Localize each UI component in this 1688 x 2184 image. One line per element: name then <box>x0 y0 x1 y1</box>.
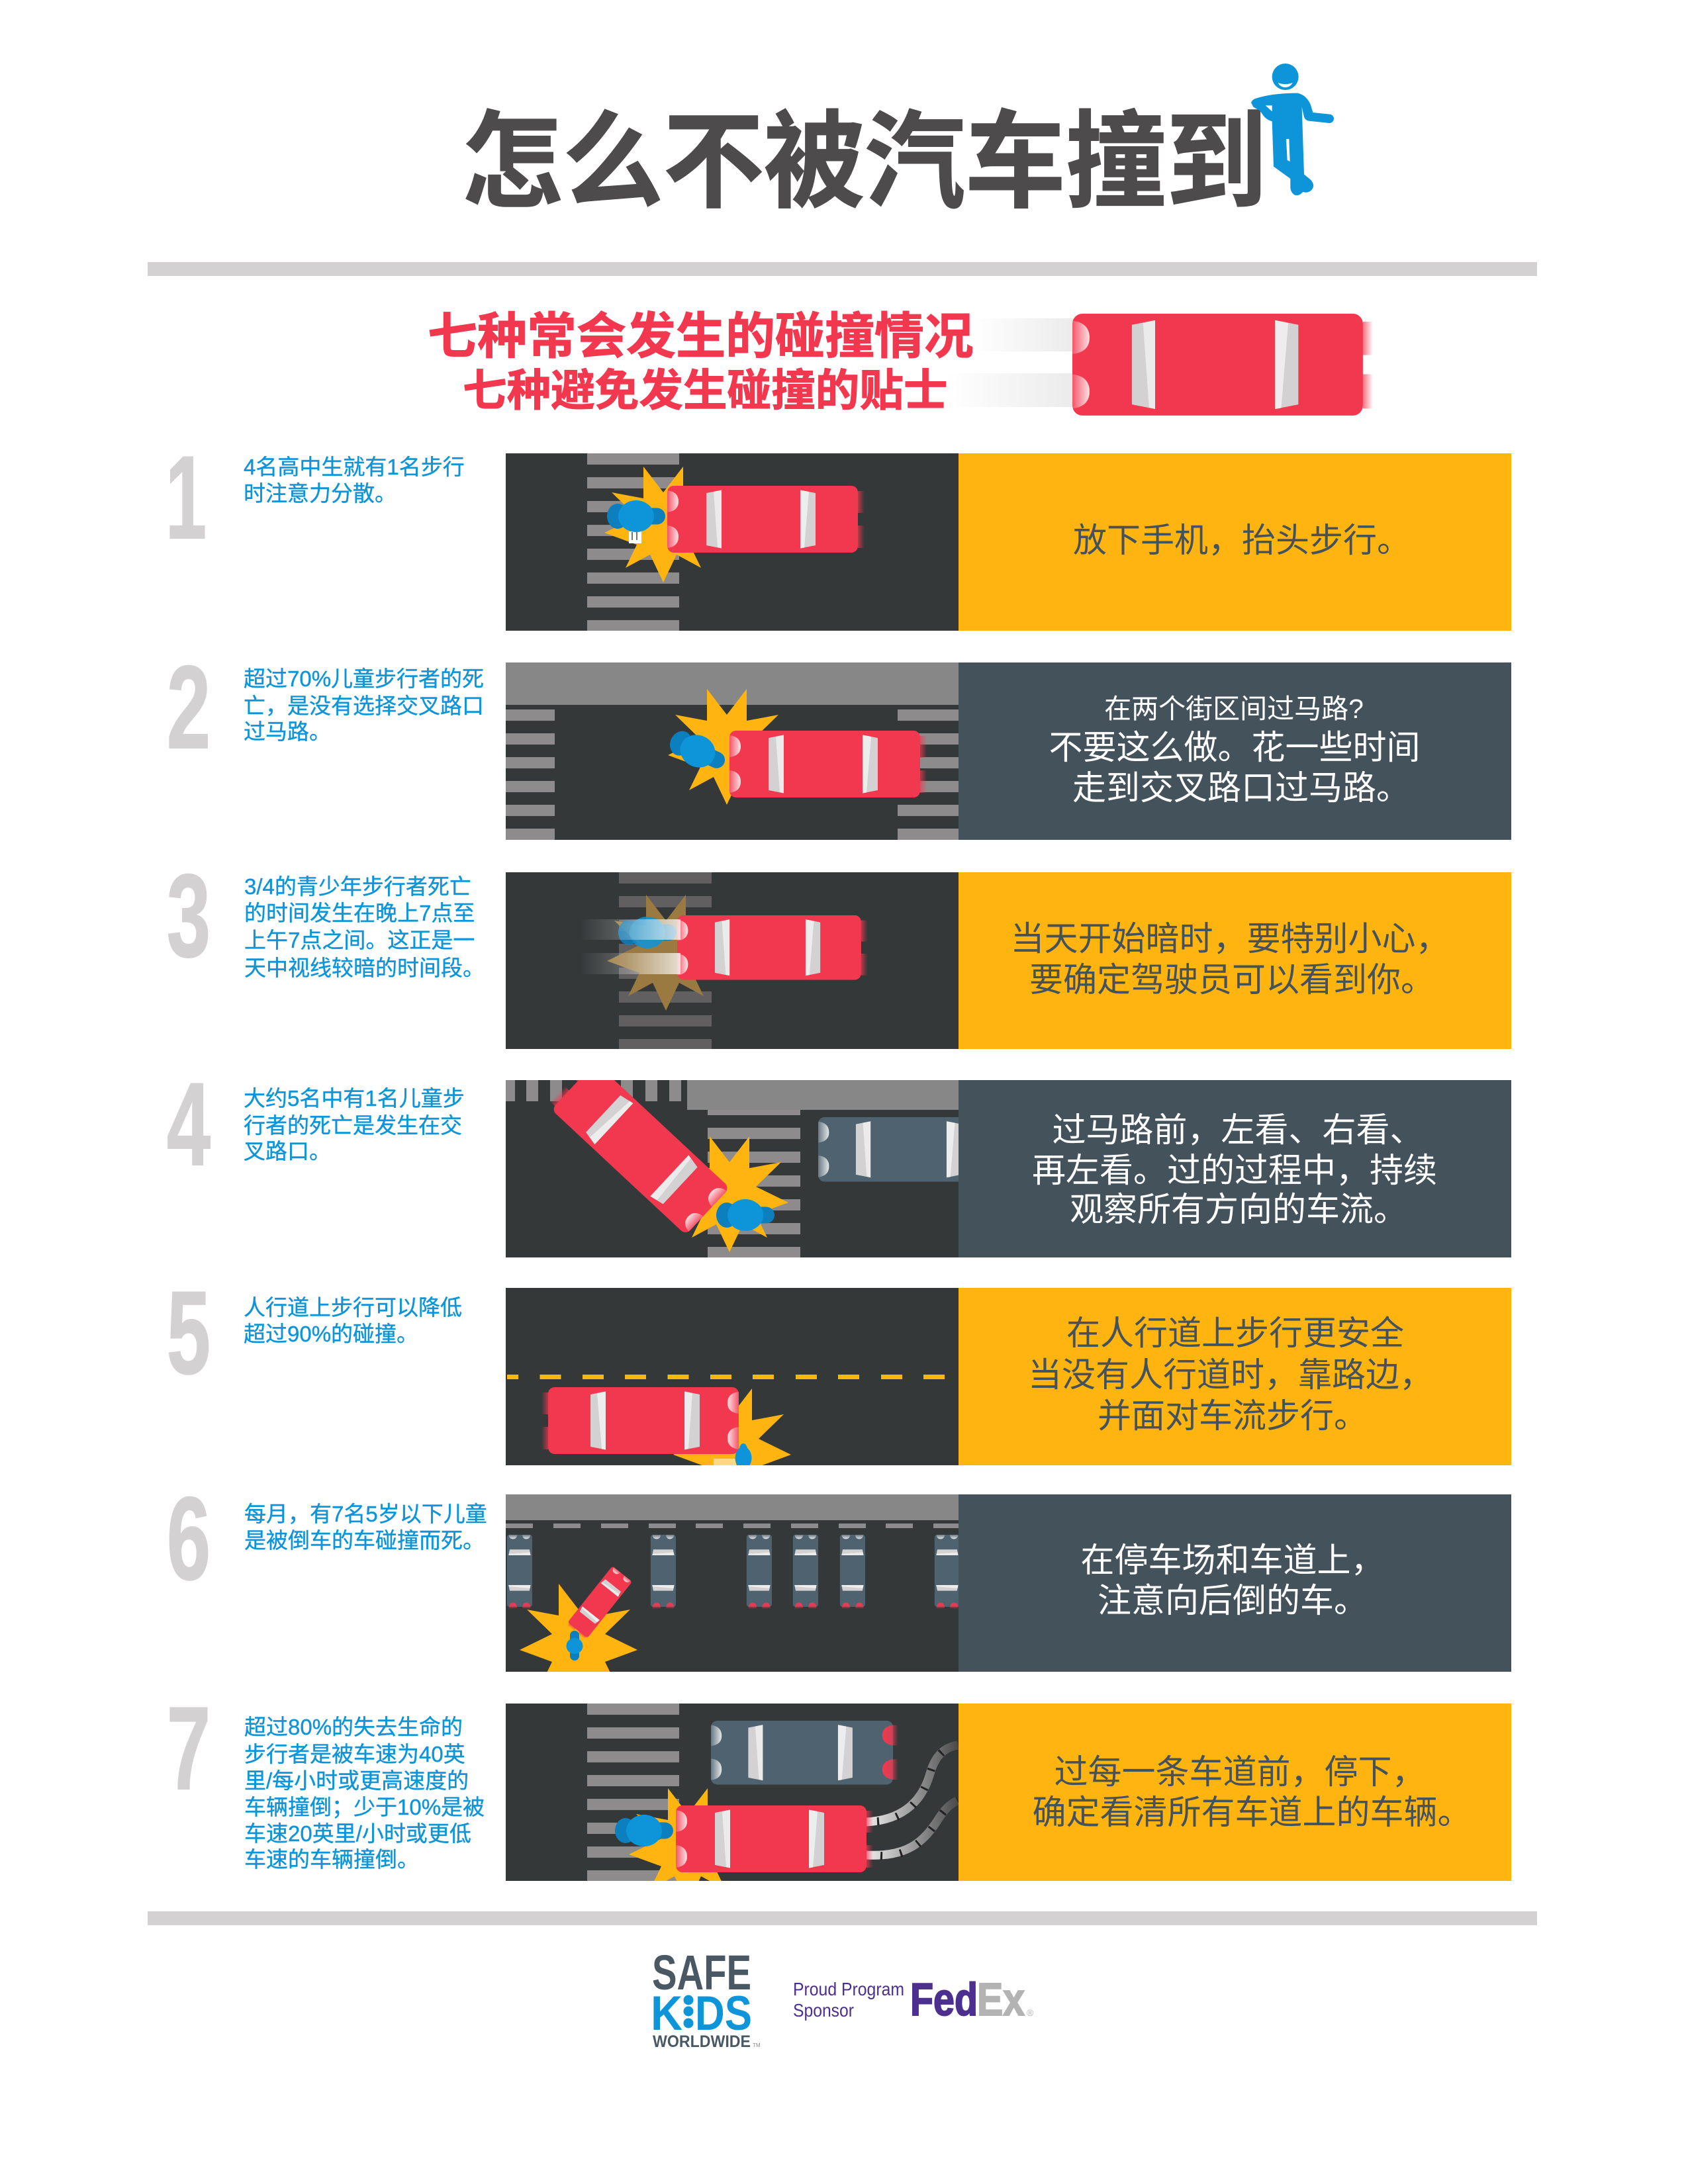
panel: tip 6 <box>169 1494 1511 1672</box>
advice text 6: 注意向后倒的车。 <box>1098 1582 1368 1619</box>
advice text 2: 不要这么做。花一些时间 <box>1049 729 1421 766</box>
advice text 4: 观察所有方向的车流。 <box>1070 1191 1407 1228</box>
number 4: 4 <box>167 1058 211 1190</box>
advice panel 6 <box>959 1494 1511 1672</box>
statistic 7: 车辆撞倒；少于10%是被 <box>244 1795 485 1819</box>
road scene 6 <box>506 1494 959 1672</box>
statistic 4 <box>244 1086 465 1163</box>
sponsor text: Sponsor <box>793 2000 854 2021</box>
statistic 6: 每月，有7名5岁以下儿童 <box>244 1502 487 1526</box>
road scene 7 <box>506 1704 959 1881</box>
top divider <box>148 262 1537 276</box>
road scene 1 <box>506 453 959 631</box>
logo: FedEx <box>910 1974 1034 2025</box>
advice panel 4 <box>959 1080 1511 1257</box>
number 1: 1 <box>165 432 207 563</box>
road scene 3 <box>506 872 959 1050</box>
number 7: 7 <box>167 1682 211 1814</box>
statistic 7 <box>244 1715 485 1872</box>
road scene 4 <box>506 1080 959 1257</box>
advice text 3: 当天开始暗时，要特别小心， <box>1010 920 1450 958</box>
logo: FedEx: Ex <box>977 1974 1025 2025</box>
statistic 7: 步行者是被车速为40英 <box>244 1742 465 1766</box>
panel: tip 7 <box>169 1704 1511 1881</box>
logo: FedEx: Fed <box>910 1974 978 2025</box>
advice text 5 <box>1028 1314 1433 1435</box>
advice text 5: 并面对车流步行。 <box>1098 1397 1368 1435</box>
road scene 2 <box>506 662 959 840</box>
advice panel 3 <box>959 872 1511 1049</box>
advice text 2: 走到交叉路口过马路。 <box>1072 769 1410 807</box>
advice text 7: 过每一条车道前，停下， <box>1054 1753 1426 1791</box>
panel: tip 3 <box>168 872 1511 1049</box>
logo: Safe Kids Worldwide: DS <box>695 1987 752 2040</box>
advice text 6 <box>1080 1541 1385 1619</box>
heading: seven kinds of collisions: 七种常会发生的碰撞情况 <box>428 308 974 364</box>
advice text 3: 要确定驾驶员可以看到你。 <box>1029 961 1434 999</box>
road scene 5 <box>506 1288 959 1465</box>
statistic 4: 大约5名中有1名儿童步 <box>244 1086 465 1111</box>
logo: FedEx: ® <box>1027 2007 1034 2018</box>
number 2: 2 <box>167 641 211 773</box>
statistic 3: 的时间发生在晚上7点至 <box>244 901 475 925</box>
advice panel 1 <box>959 453 1511 631</box>
statistic 6 <box>244 1502 487 1553</box>
statistic 3: 上午7点之间。这正是一 <box>244 928 475 952</box>
advice text 6: 在停车场和车道上， <box>1080 1541 1385 1579</box>
advice text 5: 在人行道上步行更安全 <box>1066 1314 1404 1352</box>
advice text 4: 过马路前，左看、右看、 <box>1052 1111 1424 1149</box>
advice text 4: 再左看。过的过程中，持续 <box>1032 1152 1437 1189</box>
advice panel 2 <box>959 662 1511 840</box>
advice panel 7 <box>959 1704 1511 1881</box>
number 6: 6 <box>167 1473 211 1604</box>
statistic 1 <box>244 455 465 506</box>
statistic 3: 3/4的青少年步行者死亡 <box>244 874 471 899</box>
statistic 4: 叉路口。 <box>244 1139 331 1163</box>
statistic 2 <box>244 666 484 744</box>
icon: red car header <box>947 314 1373 416</box>
statistic 4: 行者的死亡是发生在交 <box>244 1113 462 1138</box>
panel: tip 2 <box>169 662 1511 840</box>
panel: tip 4 <box>167 1080 1511 1257</box>
icon: leaning pedestrian <box>1251 64 1334 195</box>
statistic 1: 4名高中生就有1名步行 <box>244 455 465 479</box>
statistic 5 <box>244 1295 462 1346</box>
advice panel 5 <box>959 1288 1511 1465</box>
logo: Safe Kids Worldwide: TM <box>753 2042 761 2048</box>
statistic 3: 天中视线较暗的时间段。 <box>244 956 485 980</box>
statistic 7: 车速20英里/小时或更低 <box>244 1821 471 1846</box>
advice text 7: 确定看清所有车道上的车辆。 <box>1032 1794 1472 1831</box>
statistic 7: 里/每小时或更高速度的 <box>244 1768 469 1793</box>
sponsor text: Proud Program <box>793 1979 904 1999</box>
statistic 2: 亡，是没有选择交叉路口 <box>244 694 484 718</box>
advice text 2: 在两个街区间过马路? <box>1104 694 1364 724</box>
logo: Safe Kids Worldwide: K <box>651 1987 682 2040</box>
title: 怎么不被汽车撞到 <box>462 104 1267 222</box>
advice text 1: 放下手机，抬头步行。 <box>1073 522 1411 559</box>
logo: Safe Kids Worldwide: SAFE <box>652 1945 751 2000</box>
bottom divider <box>148 1911 1537 1925</box>
statistic 5: 超过90%的碰撞。 <box>244 1322 418 1346</box>
statistic 7: 车速的车辆撞倒。 <box>244 1847 419 1872</box>
statistic 7: 超过80%的失去生命的 <box>244 1715 463 1739</box>
advice text 3 <box>1010 920 1450 999</box>
advice text 2 <box>1049 694 1421 807</box>
advice text 5: 当没有人行道时，靠路边， <box>1028 1356 1433 1394</box>
advice text 4 <box>1032 1111 1437 1228</box>
statistic 6: 是被倒车的车碰撞而死。 <box>244 1528 485 1553</box>
logo: Safe Kids Worldwide <box>651 1945 761 2051</box>
panel: tip 1 <box>169 453 1511 631</box>
advice text 7 <box>1032 1753 1472 1831</box>
statistic 2: 过马路。 <box>244 719 331 744</box>
statistic 1: 时注意力分散。 <box>244 481 397 506</box>
statistic 5: 人行道上步行可以降低 <box>244 1295 462 1320</box>
statistic 2: 超过70%儿童步行者的死 <box>244 666 484 691</box>
heading: seven tips: 七种避免发生碰撞的贴士 <box>463 367 948 416</box>
number 5: 5 <box>167 1267 211 1398</box>
sponsor text <box>793 1979 904 2021</box>
statistic 3 <box>244 874 485 980</box>
logo: Safe Kids Worldwide: WORLDWIDE <box>653 2032 751 2051</box>
panel: tip 5 <box>168 1288 1511 1465</box>
number 3: 3 <box>167 850 211 981</box>
